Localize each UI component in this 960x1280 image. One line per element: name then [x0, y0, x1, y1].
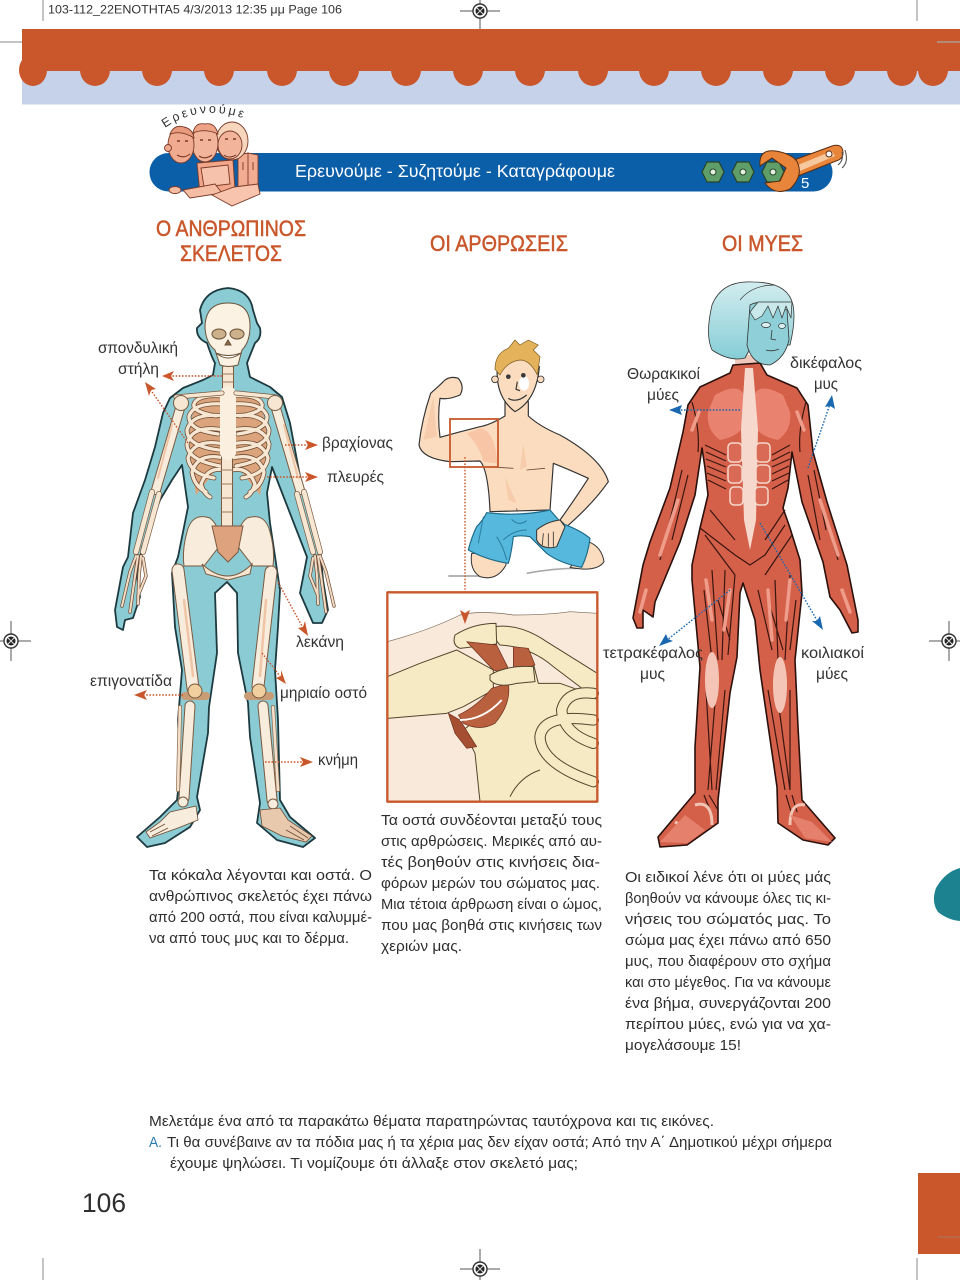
text: activity instructions — [149, 1113, 832, 1172]
registration mark right — [929, 621, 960, 661]
heading: skeleton: ΣΚΕΛΕΤΟΣ — [180, 241, 282, 266]
bar number: 5 — [801, 175, 809, 192]
label: quadriceps: μυς — [640, 666, 665, 683]
label: abdominals — [801, 645, 865, 683]
heading: muscles: ΟΙ ΜΥΕΣ — [722, 231, 803, 256]
acromion top — [454, 623, 497, 648]
text: skeleton paragraph — [149, 867, 372, 947]
label: pelvis: λεκάνη — [296, 634, 344, 651]
label: spine: σπονδυλική — [98, 340, 178, 357]
foot tone — [660, 815, 832, 843]
text: skeleton paragraph: ανθρώπινος σκελετός έχει πάνω — [149, 888, 372, 905]
page number: 106 — [82, 1188, 126, 1218]
text: muscles paragraph: ένα βήμα, συνεργάζονται 200 — [625, 995, 831, 1012]
clavicle — [494, 626, 597, 700]
knees — [471, 553, 506, 578]
skin area — [387, 612, 597, 802]
face — [747, 302, 789, 365]
ribs — [187, 396, 224, 497]
ribs in detail — [540, 693, 593, 782]
section bar title: Ερευνούμε - Συζητούμε - Καταγράφουμε — [295, 161, 615, 181]
label: femur: μηριαίο οστό — [280, 685, 367, 702]
label: ribs: πλευρές — [327, 469, 384, 486]
arrow: femur — [262, 653, 286, 684]
pelvis — [183, 517, 274, 580]
text: muscles paragraph: και στο μέγεθος. Για να κάνουμε — [625, 974, 831, 991]
arrow: spine to neck — [162, 371, 222, 381]
label: biceps: δικέφαλος — [790, 355, 862, 372]
text: activity instructions: Τι θα συνέβαινε αν τα πόδια μας ή τα χέρια μας δεν είχαν οστά; Από την Α΄ Δημοτικού μέχρι σήμερα — [167, 1134, 832, 1151]
label: quadriceps — [603, 645, 703, 683]
label: biceps: μυς — [814, 376, 838, 393]
hand on shorts — [537, 520, 565, 548]
text: muscles paragraph: περίπου μύες, ενώ για να χα- — [625, 1016, 831, 1033]
registration mark bottom — [460, 1249, 500, 1280]
section bar — [150, 153, 832, 192]
legs — [178, 570, 278, 809]
text: muscles paragraph — [625, 869, 831, 1054]
shorts — [468, 510, 590, 567]
body silhouette — [115, 288, 328, 847]
text: muscles paragraph: σώμα μας έχει πάνω από 650 — [625, 932, 831, 949]
lower muscles — [458, 683, 509, 727]
arrow: abdominals — [760, 523, 823, 630]
text: joints paragraph: Μια τέτοια άρθρωση είναι ο ώμος, — [381, 896, 602, 913]
hair — [495, 340, 540, 375]
torso and arms — [419, 377, 608, 527]
registration mark top — [460, 0, 500, 31]
label: quadriceps: τετρακέφαλος — [603, 645, 703, 662]
registration mark left — [0, 621, 31, 661]
arrow: shoulder to detail — [460, 457, 470, 624]
text: muscles paragraph: νήσεις του σώματός μας. Το — [625, 911, 831, 928]
ribcage backing — [188, 396, 268, 495]
arrow: biceps — [808, 395, 835, 468]
label: tibia: κνήμη — [318, 752, 358, 769]
sternum and spine — [176, 368, 276, 535]
arrow: kneecap — [134, 690, 183, 700]
feet — [146, 806, 312, 842]
print header text: 103-112_22ΕΝΟΤΗΤΑ5 4/3/2013 12:35 μμ Page 106 — [48, 4, 342, 16]
text: muscles paragraph: μυς, που διαφέρουν στο σχήμα — [625, 953, 831, 970]
label: abdominals: μύες — [816, 666, 848, 683]
heading: joints: ΟΙ ΑΡΘΡΩΣΕΙΣ — [430, 231, 568, 256]
panel: shoulder joint detail — [387, 592, 597, 802]
acromion — [490, 666, 535, 685]
arrow: humerus — [285, 440, 318, 450]
zoom box on shoulder — [450, 419, 498, 467]
heading: skeleton — [156, 216, 306, 266]
sternum strip — [741, 368, 758, 550]
head — [497, 357, 539, 412]
humerus — [387, 650, 493, 718]
label: pectorals: μύες — [647, 387, 679, 404]
neck — [735, 355, 763, 385]
label: pectorals: Θωρακικοί — [627, 366, 701, 383]
hair — [708, 282, 794, 359]
label: kneecap: επιγονατίδα — [90, 673, 172, 690]
label: spine: στήλη — [118, 361, 159, 378]
body outline — [633, 363, 858, 847]
curved label: Ερευνούμε: Ερευνούμε — [161, 104, 244, 128]
abs — [728, 443, 770, 505]
arrow: pelvis — [278, 582, 308, 636]
arrow: tibia — [265, 757, 313, 767]
text: activity instructions: Α. — [149, 1134, 162, 1151]
text: muscles paragraph: μογελάσουμε 15! — [625, 1037, 741, 1054]
text: joints paragraph: φόρων μερών του σώματος μας. — [381, 875, 600, 892]
banner — [19, 29, 960, 104]
arrow: pectorals — [669, 405, 740, 415]
text: joints paragraph: τές βοηθούν στις κινήσεις δια- — [381, 854, 600, 871]
label: biceps — [790, 355, 862, 393]
knee highlights — [705, 652, 787, 713]
shadows — [448, 568, 577, 576]
text: joints paragraph: χεριών μας. — [381, 938, 462, 955]
text: skeleton paragraph: από 200 οστά, που είναι καλυμμέ- — [149, 909, 372, 926]
text: muscles paragraph: βοηθούν να κάνουμε όλες τις κι- — [625, 890, 831, 907]
arrow: ribs — [267, 472, 318, 482]
text: muscles paragraph: Οι ειδικοί λένε ότι οι μύες μάς — [625, 869, 831, 886]
icon: children at computer — [164, 122, 260, 206]
ankle bands — [675, 804, 820, 832]
muscle lines — [660, 402, 838, 815]
label: spine — [98, 340, 178, 378]
decorative teal blob — [934, 868, 960, 921]
text: activity instructions: έχουμε ψηλώσει. Τι νομίζουμε ότι άλλαξε στον σκελετό μας; — [170, 1155, 578, 1172]
text: joints paragraph: που μας βοηθά στις κινήσεις των — [381, 917, 602, 934]
arrow: quadriceps — [659, 590, 730, 646]
arm highlights — [640, 412, 850, 640]
arrow: spine to ribs — [145, 382, 188, 443]
arms — [122, 396, 188, 612]
heading: skeleton: Ο ΑΝΘΡΩΠΙΝΟΣ — [156, 216, 306, 241]
label: humerus: βραχίονας — [322, 435, 393, 452]
figure: muscular body — [633, 282, 858, 847]
scapula — [463, 663, 597, 802]
chest — [708, 388, 790, 440]
orange corner tab — [918, 1173, 960, 1254]
text: joints paragraph: Τα οστά συνδέονται μεταξύ τους — [381, 812, 602, 829]
label: pectorals — [627, 366, 701, 404]
text: activity instructions: Μελετάμε ένα από τα παρακάτω θέματα παρατηρώντας ταυτόχρονα και τις εικόνες. — [149, 1113, 714, 1130]
text: joints paragraph: στις αρθρώσεις. Μερικές από αυ- — [381, 833, 602, 850]
figure: skeleton — [115, 288, 334, 847]
upper muscles — [467, 642, 512, 675]
text: skeleton paragraph: να από τους μυς και το δέρμα. — [149, 930, 349, 947]
figure: boy flexing arm — [419, 340, 608, 578]
frame — [387, 592, 597, 802]
label: abdominals: κοιλιακοί — [801, 645, 865, 662]
text: joints paragraph — [381, 812, 602, 955]
clavicles — [176, 393, 276, 397]
skull — [205, 303, 250, 366]
text: skeleton paragraph: Τα κόκαλα λέγονται και οστά. Ο — [149, 867, 372, 884]
icon: nuts and wrench — [702, 145, 846, 192]
